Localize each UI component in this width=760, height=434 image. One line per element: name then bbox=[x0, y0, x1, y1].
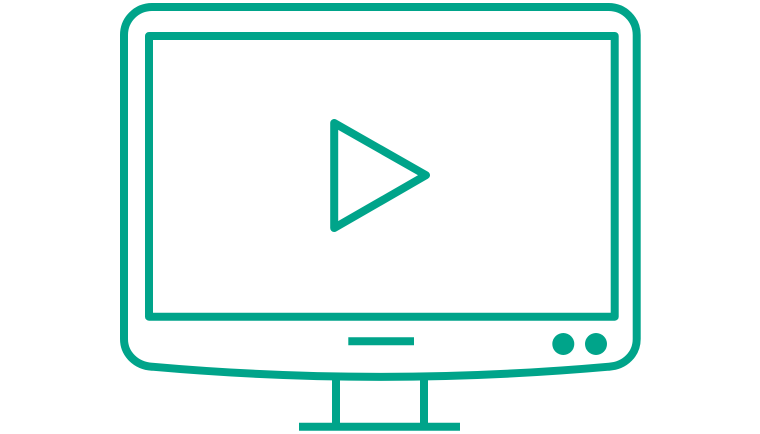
stand right leg bbox=[420, 377, 428, 423]
monitor brand bar bbox=[348, 337, 414, 345]
screen bbox=[149, 36, 615, 317]
icon: play triangle bbox=[334, 123, 426, 228]
monitor control buttons bbox=[552, 333, 607, 355]
monitor outer casing bbox=[124, 7, 637, 377]
stand base bbox=[299, 423, 460, 431]
stand bbox=[299, 377, 460, 427]
stand left leg bbox=[332, 377, 340, 423]
